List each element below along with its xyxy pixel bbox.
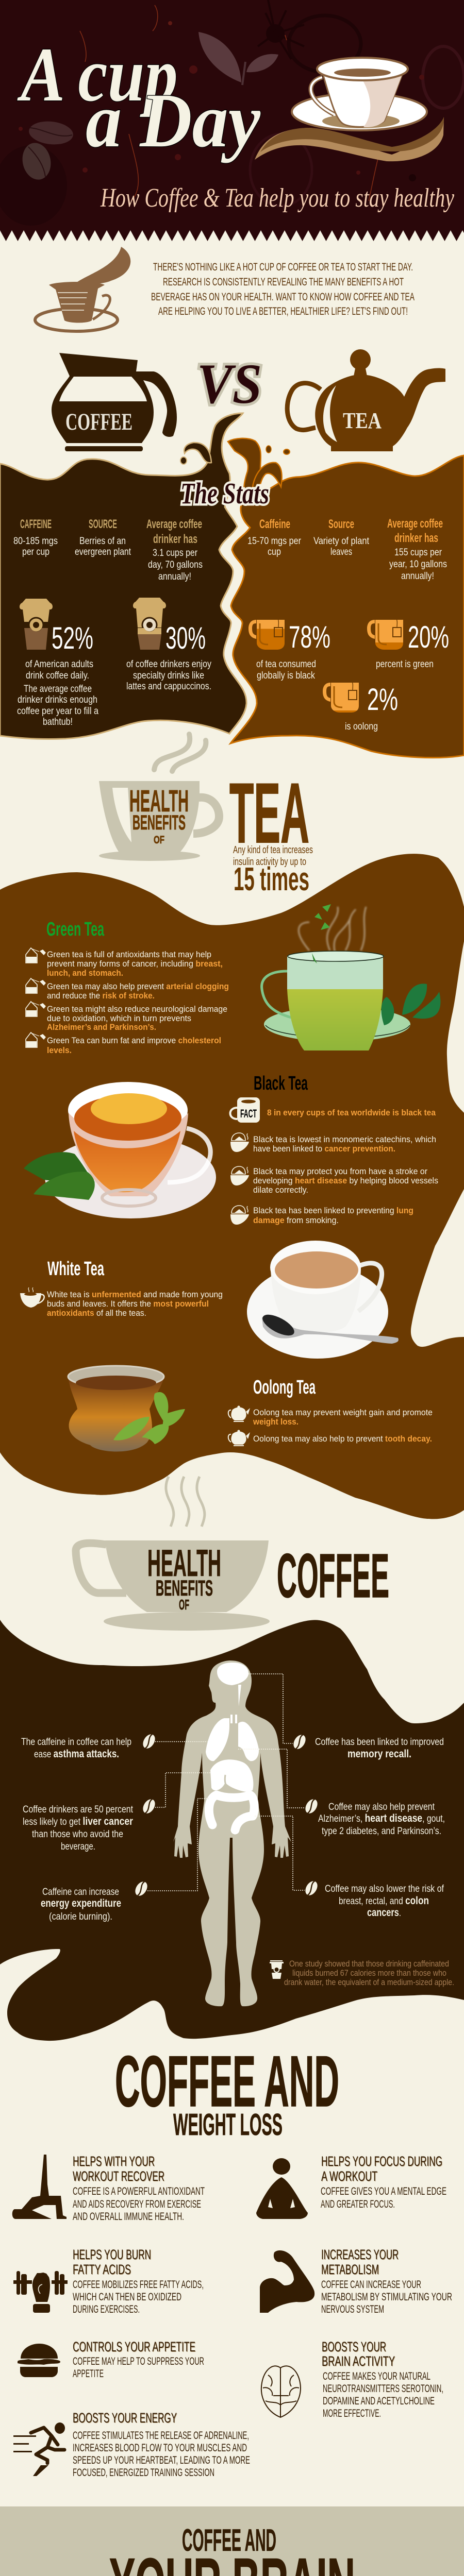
callout: energy expenditure: energy expenditure xyxy=(41,1897,121,1909)
callout: asthma xyxy=(21,1737,131,1760)
stat: coffee caffeine: 80-185 mgs xyxy=(13,536,58,547)
callout: colon cancers: breast, rectal, and colon xyxy=(339,1895,429,1907)
item: boosts energy: COFFEE STIMULATES THE RELEASE OF ADRENALINE, xyxy=(73,2430,249,2442)
text: 30 percent caption: lattes and cappuccinos. xyxy=(126,681,211,692)
callout: colon cancers: cancers. xyxy=(367,1907,401,1919)
item: increases metabolism: METABOLISM xyxy=(321,2262,379,2277)
item: lung damage: damage from smoking. xyxy=(253,1215,339,1225)
item: increases metabolism: INCREASES YOUR xyxy=(321,2247,399,2262)
stat: tea caffeine xyxy=(247,517,302,557)
callout: study calories xyxy=(284,1959,454,1987)
callout: heart disease: Coffee may also help prevent xyxy=(328,1802,435,1812)
icon: meditating figure xyxy=(256,2158,308,2219)
stat: average coffee drinker: 3.1 cups per xyxy=(153,548,198,558)
item: neurological damage: Green tea might also reduce neurological damage xyxy=(47,1004,227,1014)
item: burn fatty acids: FATTY ACIDS xyxy=(73,2262,131,2277)
stat: 20 percent: percent is green xyxy=(376,659,434,670)
icon: coffee pot xyxy=(52,353,177,451)
item: burn fatty acids: HELPS YOU BURN xyxy=(73,2247,151,2262)
list: black tea benefits xyxy=(230,1133,438,1225)
stat: coffee source: Berries of an xyxy=(79,536,126,547)
item: boosts brain activity: BOOSTS YOUR xyxy=(322,2339,386,2354)
item: boosts energy: INCREASES BLOOD FLOW TO YOUR MUSCLES AND xyxy=(73,2442,247,2454)
heading: coffee and your brain xyxy=(109,2523,355,2576)
text: health benefits of: BENEFITS xyxy=(132,811,186,834)
stat: tea caffeine: Caffeine xyxy=(259,517,290,531)
image: oolong tea glass xyxy=(68,1366,185,1452)
icon: tea header cup: HEALTH xyxy=(129,784,189,818)
item: workout recovery: AND OVERALL IMMUNE HEALTH. xyxy=(73,2211,184,2223)
item: focus during workout: AND GREATER FOCUS. xyxy=(321,2198,395,2210)
stat: tea caffeine: 15-70 mgs per xyxy=(247,536,302,547)
item: neurological damage: Alzheimer’s and Parkinson’s. xyxy=(47,1022,156,1032)
title: A cup xyxy=(17,32,178,117)
item: cancer prevention: Black tea is lowest in monomeric catechins, which xyxy=(253,1134,436,1144)
callout: liver cancer: less likely to get liver cancer xyxy=(23,1816,133,1827)
icon: small takeaway cup xyxy=(270,1960,284,1979)
item: controls appetite: APPETITE xyxy=(73,2368,104,2380)
stat: 20 percent xyxy=(367,618,449,670)
stat: tea source xyxy=(313,517,370,557)
callout: colon cancers xyxy=(325,1884,444,1919)
image: black tea glass xyxy=(24,1082,216,1218)
stat: average tea drinker xyxy=(387,517,447,582)
item: tooth decay xyxy=(228,1430,432,1446)
item: tooth decay: Oolong tea may also help to prevent tooth decay. xyxy=(253,1434,432,1444)
heading: coffee and weight loss: WEIGHT LOSS xyxy=(173,2108,283,2142)
stat: 52 percent xyxy=(20,599,93,655)
item: boosts energy: BOOSTS YOUR ENERGY xyxy=(73,2410,177,2426)
item: boosts energy: SPEEDS UP YOUR HEARTBEAT, LEADING TO A MORE xyxy=(73,2454,250,2466)
icon: flexed arm xyxy=(260,2250,314,2313)
callout: energy expenditure: Caffeine can increase xyxy=(42,1887,119,1897)
item: increases metabolism xyxy=(260,2247,452,2315)
text: health benefits of: BENEFITS xyxy=(156,1576,213,1601)
item: antioxidants: Green tea is full of antioxidants that may help xyxy=(47,950,211,959)
stat: average tea drinker: 155 cups per xyxy=(394,547,442,558)
stat: average tea drinker: drinker has xyxy=(394,531,438,545)
text block: introduction xyxy=(151,261,415,317)
text: 52 percent caption: drinker drinks enough xyxy=(18,694,97,705)
text: 30 percent caption: of coffee drinkers enjoy xyxy=(126,659,211,670)
stat: tea caffeine: cup xyxy=(268,547,281,557)
stat: average coffee drinker: drinker has xyxy=(153,532,197,546)
callout: liver cancer: Coffee drinkers are 50 percent xyxy=(23,1804,134,1815)
callout: heart disease: type 2 diabetes, and Parkinson’s. xyxy=(322,1826,441,1837)
list: oolong tea benefits xyxy=(228,1405,433,1446)
stat: tea source: Variety of plant xyxy=(313,536,370,547)
item: heart disease xyxy=(230,1166,438,1195)
callout: asthma: ease asthma attacks. xyxy=(34,1748,119,1760)
stat: average coffee drinker: day, 70 gallons xyxy=(148,560,203,570)
heading: coffee and your brain: COFFEE AND xyxy=(182,2523,276,2557)
item: workout recovery: HELPS WITH YOUR xyxy=(73,2154,155,2169)
text block: white tea: White tea is unfermented and made from young xyxy=(47,1290,223,1299)
item: workout recovery: COFFEE IS A POWERFUL ANTIOXIDANT xyxy=(73,2185,205,2197)
panel: coffee stats xyxy=(0,413,246,739)
text: 52 percent caption: drink coffee daily. xyxy=(26,670,89,681)
icon: yoga pose xyxy=(12,2155,67,2219)
text: 52 percent caption: bathtub! xyxy=(43,717,73,727)
item: heart disease: developing heart disease by helping blood vessels xyxy=(253,1176,438,1185)
text: TEA xyxy=(229,766,309,860)
heading: Black Tea: Black Tea xyxy=(254,1073,308,1094)
decorative coffee splashes xyxy=(0,0,464,226)
image: white tea cup and spoon xyxy=(247,1241,399,1359)
icon: white tea cup xyxy=(20,1287,44,1308)
callout: heart disease: Alzheimer’s, heart disease, gout, xyxy=(318,1812,445,1824)
image: green tea glass xyxy=(262,904,440,1050)
text: 52 percent caption: of American adults xyxy=(25,659,93,670)
heading: Oolong Tea: Oolong Tea xyxy=(253,1377,316,1398)
text: health benefits of: OF xyxy=(154,834,164,846)
diagram: dotted leader lines xyxy=(147,1674,305,1891)
item: antioxidants: lunch, and stomach. xyxy=(47,968,123,978)
stat: 78 percent: of tea consumed xyxy=(256,659,316,670)
item: boosts energy: FOCUSED, ENERGIZED TRAINING SESSION xyxy=(73,2467,214,2479)
callout: colon cancers: Coffee may also lower the risk of xyxy=(325,1884,444,1894)
item: cholesterol xyxy=(26,1032,221,1055)
stat: average coffee drinker: Average coffee xyxy=(146,517,202,531)
stat: 78 percent: globally is black xyxy=(257,670,315,681)
label: COFFEE: COFFEE xyxy=(65,409,132,435)
stat: 2 percent: is oolong xyxy=(345,721,378,732)
item: lung damage: Black tea has been linked to preventing lung xyxy=(253,1206,413,1215)
callout: liver cancer: beverage. xyxy=(61,1841,95,1852)
item: cholesterol: levels. xyxy=(47,1045,72,1055)
item: workout recovery: AND AIDS RECOVERY FROM EXERCISE xyxy=(73,2198,201,2210)
item: heart disease: Black tea may protect you from have a stroke or xyxy=(253,1166,427,1176)
item: weight loss: weight loss. xyxy=(253,1417,299,1427)
item: cholesterol: Green Tea can burn fat and improve cholesterol xyxy=(47,1036,221,1045)
item: heart disease: dilate correctly. xyxy=(253,1185,308,1195)
item: controls appetite xyxy=(18,2339,204,2380)
stat: average coffee drinker: annually! xyxy=(158,571,191,582)
icon: coffee header cup: HEALTH xyxy=(147,1543,221,1584)
item: boosts brain activity xyxy=(261,2339,443,2419)
icon: teapot xyxy=(287,349,445,451)
item: neurological damage xyxy=(26,1002,227,1032)
callout: insulin fact: insulin activity by up to xyxy=(233,856,306,868)
diagram: human body xyxy=(173,1660,291,2006)
callout: liver cancer: than those who avoid the xyxy=(32,1829,123,1840)
item: arterial clogging: Green tea may also help prevent arterial clogging xyxy=(47,981,229,991)
icon: coffee header cup xyxy=(76,1540,270,1631)
panel: health benefits of coffee xyxy=(0,1620,464,2041)
text: 52 percent caption: coffee per year to fill a xyxy=(17,706,98,717)
callout: heart disease xyxy=(318,1802,445,1837)
item: controls appetite: CONTROLS YOUR APPETITE xyxy=(73,2339,195,2354)
callout: asthma: The caffeine in coffee can help xyxy=(21,1737,131,1748)
icon: coffee beans on leaders xyxy=(133,1732,320,1898)
text block: white tea: buds and leaves. It offers the most powerful xyxy=(47,1299,209,1309)
callout: insulin fact: Any kind of tea increases xyxy=(233,844,313,856)
item: weight loss: Oolong tea may prevent weight gain and promote xyxy=(253,1408,433,1417)
heading: coffee and weight loss xyxy=(115,2041,339,2142)
stat: average tea drinker: year, 10 gallons xyxy=(389,559,447,570)
text block: white tea: antioxidants of all the teas. xyxy=(47,1308,146,1318)
icon: tea header cup xyxy=(99,781,219,861)
stat: 2 percent xyxy=(323,681,398,732)
item: controls appetite: COFFEE MAY HELP TO SUPPRESS YOUR xyxy=(73,2355,204,2367)
heading: VS: VS xyxy=(197,352,262,415)
stat: coffee caffeine xyxy=(13,517,58,557)
item: burn fatty acids xyxy=(13,2247,204,2315)
icon: brain outline xyxy=(261,2366,301,2417)
stat: 52 percent: 52% xyxy=(52,621,93,655)
item: neurological damage: due to oxidation, which in turn prevents xyxy=(47,1013,191,1023)
panel: header banner xyxy=(0,0,464,241)
title xyxy=(17,32,261,163)
item: workout recovery: WORKOUT RECOVER xyxy=(73,2168,164,2184)
icon: tea leaves xyxy=(198,32,278,85)
item: focus during workout: A WORKOUT xyxy=(321,2168,377,2184)
item: burn fatty acids: DURING EXERCISES. xyxy=(73,2303,140,2315)
stat: coffee source: SOURCE xyxy=(89,517,117,531)
icon: coffee header steam xyxy=(166,1477,205,1527)
item: boosts brain activity: MORE EFFECTIVE. xyxy=(323,2408,381,2419)
heading: Green Tea: Green Tea xyxy=(46,919,105,940)
item: weight loss xyxy=(228,1405,433,1427)
stat: average coffee drinker xyxy=(146,517,203,582)
title: a Day xyxy=(86,78,261,163)
callout: memory xyxy=(315,1737,444,1760)
icon: header coffee cup with swoosh xyxy=(255,58,444,161)
item: increases metabolism: NERVOUS SYSTEM xyxy=(321,2303,384,2315)
stat: 78 percent: 78% xyxy=(289,620,330,654)
icon: dumbbell and fist xyxy=(13,2271,68,2313)
callout: insulin fact xyxy=(233,844,313,897)
text: health benefits of: OF xyxy=(179,1597,189,1613)
callout: insulin fact: 15 times xyxy=(234,860,309,897)
text: 52 percent caption: The average coffee xyxy=(24,684,92,694)
stat: tea source: Source xyxy=(328,517,354,531)
callout: energy expenditure: (calorie burning). xyxy=(49,1911,112,1922)
item: focus during workout xyxy=(256,2154,446,2219)
item: boosts energy xyxy=(13,2410,250,2479)
item: antioxidants: prevent many forms of cancer, including breast, xyxy=(47,959,223,969)
item: burn fatty acids: WHICH CAN THEN BE OXIDIZED xyxy=(73,2291,181,2303)
label: TEA: TEA xyxy=(343,408,382,433)
stat: 2 percent: 2% xyxy=(367,682,398,717)
item: boosts brain activity: BRAIN ACTIVITY xyxy=(322,2353,395,2369)
item: antioxidants xyxy=(26,948,223,978)
panel: health benefits of tea xyxy=(0,854,464,1519)
panel: coffee and your brain xyxy=(0,2506,464,2576)
item: cancer prevention xyxy=(230,1133,436,1154)
stat: coffee caffeine: CAFFEINE xyxy=(20,517,52,531)
stat: coffee source: evergreen plant xyxy=(75,547,131,557)
callout: black tea fact: 8 in every cups of tea worldwide is black tea xyxy=(267,1108,436,1117)
text: 30 percent caption: specialty drinks like xyxy=(133,670,204,681)
stat: 30 percent: 30% xyxy=(165,621,206,655)
icon: fact mug: FACT xyxy=(240,1107,257,1120)
text block: white tea xyxy=(20,1287,223,1318)
text: 52 percent caption xyxy=(17,659,98,727)
callout: liver cancer xyxy=(23,1804,134,1852)
icon: running figure xyxy=(13,2422,65,2476)
item: arterial clogging xyxy=(26,978,229,1001)
icon: tea header steam xyxy=(154,734,206,771)
callout: memory: memory recall. xyxy=(347,1748,411,1760)
icon: fact mug xyxy=(230,1097,260,1123)
icon: burger xyxy=(18,2344,60,2377)
item: arterial clogging: and reduce the risk of stroke. xyxy=(47,991,155,1001)
stat: coffee source xyxy=(75,517,131,557)
item: lung damage xyxy=(230,1206,413,1225)
item: cancer prevention: have been linked to cancer prevention. xyxy=(253,1144,395,1154)
list: green tea benefits xyxy=(26,948,229,1055)
heading: White Tea: White Tea xyxy=(47,1258,105,1280)
heading: The Stats: The Stats xyxy=(180,477,269,510)
icon: coffee beans xyxy=(19,120,74,182)
callout: energy expenditure xyxy=(41,1887,121,1922)
item: workout recovery xyxy=(12,2154,205,2223)
text: 30 percent caption xyxy=(126,659,211,692)
panel: tea stats xyxy=(228,438,464,758)
stat: average tea drinker: annually! xyxy=(401,571,434,582)
item: burn fatty acids: COFFEE MOBILIZES FREE FATTY ACIDS, xyxy=(73,2279,204,2291)
icon: intro coffee cup xyxy=(35,247,130,331)
stat: coffee caffeine: per cup xyxy=(22,547,49,557)
stat: 30 percent xyxy=(133,598,206,655)
text: health benefits of xyxy=(129,784,189,846)
stat: tea source: leaves xyxy=(330,547,352,557)
text: health benefits of xyxy=(147,1543,221,1613)
stat: 78 percent xyxy=(248,618,330,681)
